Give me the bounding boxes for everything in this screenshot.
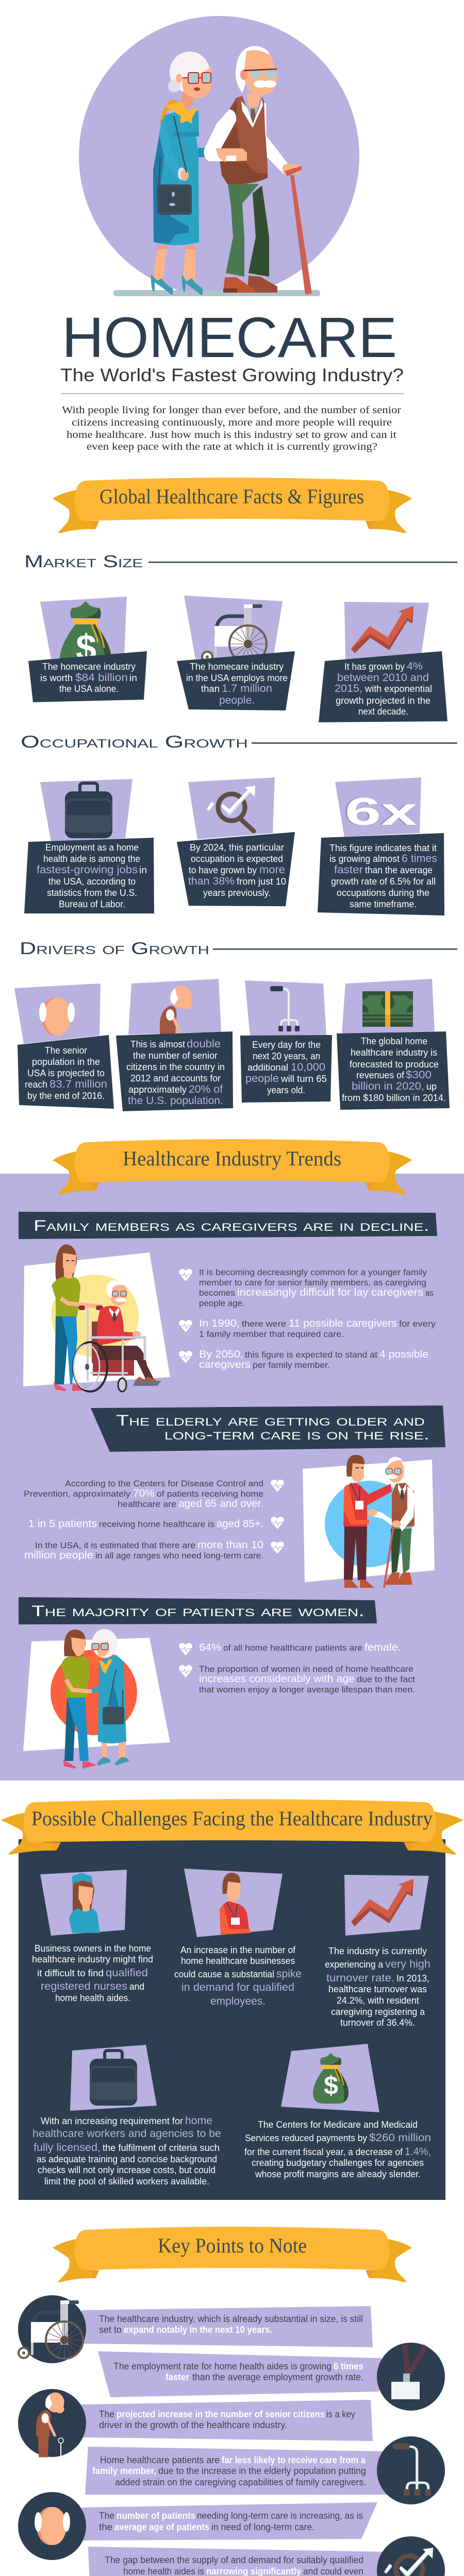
text: very high turnover rate: In 2013, (396, 1973, 429, 1984)
text: spike in demand: employees. (210, 1995, 266, 2007)
icon: heart bullet (179, 1665, 192, 1677)
text: 10,000 people: 10,000 (291, 1061, 325, 1073)
text: lifespan: The proportion of women in need of home healthcare (199, 1664, 413, 1674)
text: $260 million: 1.4%, (405, 2146, 431, 2158)
text: 6 times faster: same timeframe. (350, 899, 417, 909)
text: more than 38%: By 2024, this particular (190, 842, 284, 853)
text: 6 times faster: This figure indicates that it (329, 843, 437, 853)
header: family members (19, 1212, 437, 1239)
panel: market size card 3 (319, 602, 448, 722)
text: very high turnover rate: very high (385, 1958, 430, 1970)
text: spike in demand: spike (276, 1968, 302, 1980)
text: more than 10 million (24, 1539, 263, 1561)
text: 70% aged 65 and over (24, 1479, 263, 1510)
text: double / 20%: 20% of (189, 1083, 223, 1095)
header: majority are women (19, 1597, 377, 1624)
intro paragraph: With people living for longer than ever before, and the number of senior (62, 404, 401, 416)
text: 1990 figure: 11 possible caregivers (289, 1318, 397, 1329)
text: The gap between the supply of and demand for suitably qualified (105, 2555, 363, 2565)
panel: healthcare industry trends (0, 1139, 464, 1781)
text: fastest-growing jobs: fastest-growing jobs (37, 864, 138, 876)
text: $84 billion: $84 billion (75, 672, 128, 684)
text: double / 20% (126, 1038, 225, 1107)
text: qualified nurses: and (129, 1981, 144, 1992)
text: Home healthcare patients are (100, 2455, 220, 2465)
header: elderly getting older: long-term care is on the rise. (164, 1426, 429, 1443)
text: 2050 figure: this figure is expected to stand at (245, 1350, 377, 1360)
challenge card: turnover (325, 1875, 430, 2028)
text: is a key (326, 2409, 355, 2419)
key point 3 (18, 2389, 373, 2457)
text: 6 times faster (329, 843, 437, 909)
text: The (99, 2409, 114, 2419)
text: The healthcare industry, which is already substantial in size, is still (99, 2314, 363, 2324)
text: caregiving difficulty: It is becoming decreasingly common for a younger family (199, 1267, 427, 1277)
text: $300 billion: billion in 2020, (352, 1080, 424, 1092)
text: spike in demand: in demand for qualified (181, 1981, 294, 1993)
text: caregiving difficulty (199, 1267, 434, 1308)
text: 70% aged 65 and over: healthcare are (118, 1499, 176, 1509)
text: 4% growth: growth projected in the (336, 696, 430, 706)
text: very high turnover rate: 24.2%, with resident (337, 1995, 419, 2006)
text: very high turnover rate: healthcare turnover was (328, 1984, 427, 1994)
text: 1.7 million people: The homecare industry (190, 662, 284, 672)
text: 6 times (334, 2361, 363, 2371)
icon: 6x: 6x (343, 790, 415, 833)
text: than the average employment growth rate. (192, 2372, 363, 2382)
text: $300 billion: forecasted to produce (350, 1059, 439, 1070)
text: $260 million: Services reduced payments by (245, 2133, 367, 2143)
text: more than 38%: than 38% (188, 875, 235, 887)
text: 1 in 5 patients (28, 1518, 263, 1530)
challenge card: nurses (32, 1870, 153, 2003)
text: more than 38%: to have grown by (189, 865, 257, 875)
panel: drivers card 4 (337, 979, 450, 1110)
icon: heart bullet (179, 1643, 192, 1655)
text: 83.7 million: The senior (45, 1045, 87, 1056)
panel: occupational card 3 (318, 777, 444, 916)
text: double / 20%: the number of senior (133, 1050, 218, 1061)
banner: Global Healthcare Facts & Figures: Global Healthcare Facts & Figures (100, 485, 364, 508)
text: very high turnover rate (325, 1946, 430, 2028)
text: qualified nurses: healthcare industry might find (32, 1954, 153, 1964)
text: caregiving difficulty: becomes (199, 1288, 235, 1298)
header: elderly getting older (91, 1405, 445, 1452)
icon: male carer (220, 1873, 251, 1935)
illustration: carer and elderly man (303, 1455, 435, 1588)
text: 83.7 million: population in the (32, 1057, 100, 1067)
challenge card: payments (244, 2044, 431, 2179)
panel: drivers card 2 (116, 979, 233, 1111)
text: $260 million: whose profit margins are already slender. (255, 2169, 421, 2179)
text: 4% growth: next decade. (358, 706, 408, 717)
text: 70% aged 65 and over: According to the Centers for Disease Control and (65, 1479, 263, 1488)
header: family members: Family members as caregivers are in decline. (34, 1217, 429, 1234)
icon: 6x: 6x (345, 790, 417, 833)
banner: Key Points to Note (53, 2227, 412, 2282)
key point 4 (85, 2436, 445, 2504)
panel: drivers card 1 (14, 984, 114, 1109)
text: spike in demand: An increase in the number of (180, 1945, 296, 1955)
text: $84 billion: in (129, 673, 137, 683)
text: 1990 figure (199, 1318, 436, 1339)
icon: rising arrow (351, 606, 413, 653)
heading: Drivers of Growth: Drivers of Growth (20, 939, 209, 958)
text: 4% growth: with exponential (364, 684, 432, 694)
text: 83.7 million (25, 1045, 107, 1101)
elderly woman (151, 52, 211, 295)
text: 1990 figure: there were (242, 1319, 286, 1329)
text: in need of long-term care. (211, 2522, 314, 2532)
text: double / 20%: the U.S. population. (128, 1095, 223, 1107)
text: fully licensed: home (185, 2115, 212, 2127)
text (99, 2409, 355, 2430)
text: 10,000 people: will turn 65 (280, 1074, 327, 1084)
text: $300 billion (342, 1036, 446, 1103)
text: 6 times faster: is growing almost (329, 854, 400, 864)
icon: head in circle (18, 2492, 86, 2560)
banner: Healthcare Industry Trends: Healthcare Industry Trends (123, 1147, 341, 1170)
text: fastest-growing jobs: Employment as a home (45, 842, 139, 853)
text: more than 38%: more (259, 864, 285, 876)
text: qualified nurses: it difficult to find (37, 1968, 104, 1978)
intro paragraph: citizens increasing continuously, more and more people will require (72, 417, 392, 428)
text: $84 billion: is worth (40, 673, 73, 683)
text: 10,000 people: years old. (267, 1085, 305, 1095)
text: 70% aged 65 and over: aged 65 and over. (178, 1498, 263, 1510)
hero backdrop circle (79, 16, 359, 296)
text: 10,000 people: next 20 years, an (253, 1051, 320, 1061)
text: 4% growth: 4% (407, 660, 423, 672)
banner: Possible Challenges: Possible Challenges Facing the Healthcare Industry (31, 1807, 433, 1830)
text: $260 million: $260 million (369, 2132, 431, 2144)
text: 64% female: female. (364, 1642, 401, 1653)
text: fully licensed: fully licensed, (34, 2142, 101, 2154)
text: fully licensed: healthcare workers and agencies to be (32, 2128, 221, 2140)
text: The (99, 2511, 114, 2521)
text: 6 times faster: growth rate of 6.5% for all (331, 876, 436, 887)
heading: Market Size: Market Size (24, 552, 143, 571)
text: 6 times faster: 6 times (402, 853, 437, 865)
text: 10,000 people: Every day for the (252, 1040, 321, 1050)
text: 1.7 million people: in the USA employs more (186, 673, 288, 683)
text: more than 10 million: million people (24, 1550, 93, 1561)
key point 5 (18, 2492, 377, 2560)
icon: quad cane (270, 986, 300, 1031)
text: 10,000 people (245, 1040, 327, 1095)
text: 1 in 5 patients: 1 in 5 patients (28, 1518, 97, 1530)
text: 64% female: 64% (199, 1642, 221, 1653)
text: 83.7 million: USA is projected to (27, 1068, 105, 1078)
text: qualified nurses (32, 1943, 153, 2003)
text: caregiving difficulty: increasingly difficult for lay caregivers (237, 1287, 423, 1298)
text: 83.7 million: reach (25, 1079, 47, 1090)
text (99, 2314, 363, 2335)
text: 4% growth (335, 660, 432, 717)
text: 2050 figure: 4 possible (379, 1349, 428, 1360)
text: 10,000 people: people (245, 1073, 279, 1084)
banner: Possible Challenges (1, 1799, 463, 1855)
intro paragraph (62, 404, 401, 452)
text: spike in demand (174, 1945, 302, 2007)
text: the (99, 2522, 112, 2532)
text (92, 2455, 366, 2487)
text: more than 38% (188, 842, 286, 898)
heading: Occupational Growth: Occupational Growth (21, 732, 248, 751)
icon: money bag (60, 601, 111, 674)
illustration: two women (23, 1629, 170, 1769)
text: more than 38%: from just 10 (237, 876, 286, 887)
header: majority are women: The majority of patients are women. (31, 1603, 364, 1620)
text: $260 million (244, 2120, 431, 2179)
icon: wheelchair (202, 604, 267, 663)
text: number of patients (117, 2511, 195, 2521)
icon: magnifier with check (207, 786, 255, 831)
banner: Global Healthcare Facts & Figures (53, 478, 412, 533)
text: more than 38%: years previously. (203, 888, 271, 898)
subtitle: The World's Fastest Growing Industry? (60, 365, 404, 385)
text: very high turnover rate: turnover rate. (326, 1972, 394, 1984)
key point 2 (98, 2343, 445, 2411)
icon: heart bullet (271, 1517, 284, 1529)
text: $300 billion: from $180 billion in 2014. (342, 1093, 446, 1103)
text: very high turnover rate: The industry is currently (328, 1946, 427, 1956)
banner: Healthcare Industry Trends (53, 1139, 412, 1195)
text: 2050 figure: per family member. (253, 1360, 330, 1370)
text: 83.7 million: by the end of 2016. (27, 1091, 105, 1101)
text: 70% aged 65 and over: Prevention, approximately (24, 1489, 131, 1499)
text: very high turnover rate: experiencing a (325, 1959, 384, 1970)
text (113, 2361, 363, 2382)
text: 6 times faster: occupations during the (337, 888, 429, 898)
text: projected increase in the number of senior citizens (117, 2409, 325, 2419)
icon: stooped senior (160, 986, 192, 1059)
text: 2050 figure: caregivers (199, 1359, 251, 1370)
text: 1.7 million people (186, 662, 288, 706)
text: qualified nurses: registered nurses (41, 1980, 127, 1992)
text: caregiving difficulty: as (425, 1288, 434, 1298)
text: double / 20%: 2012 and accounts for (130, 1073, 221, 1083)
text: qualified nurses: qualified (106, 1967, 148, 1979)
text: 1.7 million people: 1.7 million (222, 683, 272, 694)
text: fully licensed: limit the pool of skilled workers available. (44, 2176, 209, 2187)
icon: head (39, 997, 75, 1036)
text: faster (165, 2372, 189, 2382)
icon: money bag: $ (76, 628, 96, 669)
text: fully licensed: checks will not only increase costs, but could (38, 2165, 216, 2175)
icon: money bag (313, 2053, 349, 2104)
intro paragraph: home healthcare. Just how much is this industry set to grow and can it (67, 429, 396, 440)
text: $84 billion (40, 662, 137, 694)
icon: 6x (343, 790, 417, 833)
text: 10,000 people: additional (247, 1062, 288, 1073)
bullets: family caregivers (179, 1267, 436, 1370)
text: $260 million: The Centers for Medicare and Medicaid (258, 2120, 418, 2130)
text: 2050 figure (199, 1349, 428, 1370)
text: added strain on the caregiving capabilities of family caregivers. (115, 2477, 366, 2487)
text: more than 10 million: more than 10 (197, 1539, 263, 1551)
icon: heart bullet (271, 1541, 284, 1554)
challenge card: demand spike (174, 1869, 302, 2007)
text: fully licensed (32, 2115, 221, 2187)
text: $84 billion: the USA alone. (59, 684, 119, 694)
hero illustration: elderly couple (79, 16, 359, 296)
text: spike in demand: could cause a substantial (174, 1969, 274, 1979)
icon: nurse (69, 1873, 100, 1933)
text: fully licensed: With an increasing requirement for (41, 2116, 183, 2126)
panel: drivers card 3 (240, 980, 332, 1103)
text: fastest-growing jobs: the USA, according to (48, 876, 136, 887)
icon: wheelchair in circle (18, 2295, 86, 2363)
icon: briefcase (65, 783, 112, 838)
icon: briefcase (90, 2050, 137, 2106)
text: fastest-growing jobs (37, 842, 147, 909)
text: 4% growth: between 2010 and (337, 672, 429, 684)
text: 1 in 5 patients: aged 85+. (217, 1518, 263, 1530)
text: $84 billion: The homecare industry (42, 662, 136, 672)
text: double / 20%: citizens in the country in (126, 1062, 225, 1072)
text: lifespan: increases considerably with age (199, 1673, 355, 1685)
text: 1990 figure: In 1990, (199, 1318, 240, 1329)
title: HOMECARE (62, 306, 397, 369)
text: $300 billion: healthcare industry is (351, 1047, 437, 1058)
icon: rising arrow (351, 1879, 413, 1926)
text: 1990 figure: 1 family member that required care. (199, 1329, 344, 1339)
text: 64% female: of all home healthcare patients are (223, 1643, 362, 1653)
text: double / 20%: This is almost (130, 1039, 185, 1049)
text: $300 billion: up (426, 1081, 437, 1092)
intro paragraph: even keep pace with the rate at which it is currently growing? (87, 441, 377, 452)
text: set to (99, 2325, 122, 2335)
bullets: women patients (179, 1642, 415, 1694)
text: fastest-growing jobs: Bureau of Labor. (59, 899, 125, 909)
icon: heart bullet (271, 1480, 284, 1492)
text: 1.7 million people: people. (219, 694, 255, 706)
header: elderly getting older: The elderly are getting older and (116, 1412, 425, 1429)
panel: market size card 1 (28, 597, 147, 702)
icon: heart bullet (179, 1351, 192, 1363)
text: average age of patients (114, 2522, 209, 2532)
text: 1.7 million people: than (201, 684, 220, 694)
text: 6 times faster: than the average (365, 865, 433, 875)
text (105, 2555, 363, 2576)
text: fully licensed: as adequate training and concise background (37, 2154, 217, 2164)
text: fastest-growing jobs: statistics from the U.S. (47, 888, 137, 898)
text: double / 20%: approximately (128, 1084, 187, 1095)
text: more than 10 million: in all age ranges who need long-term care. (95, 1551, 263, 1561)
bullets: long-term care (24, 1479, 284, 1561)
panel: challenges (1, 1799, 463, 2200)
text: 4% growth: 2015, (335, 683, 362, 694)
text: $300 billion: The global home (361, 1036, 427, 1046)
text: lifespan: due to the fact (357, 1674, 415, 1684)
text: caregiving difficulty: people age. (199, 1298, 245, 1308)
text: fastest-growing jobs: health aide is among the (43, 854, 140, 864)
text: 70% aged 65 and over: 70% (133, 1488, 155, 1499)
icon: heart bullet (179, 1269, 192, 1281)
icon: money bag: $ (324, 2071, 338, 2100)
text (99, 2511, 363, 2532)
challenge card: licensing (32, 2045, 221, 2187)
icon: cane in circle (377, 2436, 445, 2504)
text: 6 times faster: faster (334, 864, 363, 876)
elderly man with cane (204, 46, 312, 295)
text: expand notably in the next 10 years. (124, 2325, 272, 2335)
panel: occupational card 2 (177, 777, 295, 906)
text: caregiving difficulty: member to care for senior family members, as caregiving (199, 1278, 426, 1287)
text: 83.7 million: 83.7 million (49, 1078, 107, 1090)
text: very high turnover rate: caregiving registering a (331, 2007, 425, 2017)
text: far less likely to receive care from a (222, 2455, 366, 2465)
icon: stooped senior in circle (18, 2389, 86, 2457)
icon: magnifier in circle (377, 2536, 445, 2576)
icon: heart bullet (179, 1320, 192, 1332)
text: 1990 figure: for every (399, 1319, 436, 1329)
text: 1 in 5 patients: receiving home healthcare is (99, 1519, 214, 1529)
panel: market size card 2 (177, 596, 295, 710)
panel: occupational card 1 (24, 779, 154, 913)
text: double / 20%: double (187, 1038, 221, 1050)
text: family member, (92, 2466, 156, 2476)
text: 2050 figure: By 2050, (199, 1349, 243, 1360)
text: spike in demand: home healthcare businesses (181, 1956, 295, 1966)
text: The employment rate for home health aides is growing (113, 2361, 332, 2371)
text: lifespan (199, 1664, 415, 1694)
text: qualified nurses: Business owners in the home (35, 1943, 151, 1954)
banner: Key Points to Note: Key Points to Note (158, 2234, 307, 2257)
text: due to the increase in the elderly population putting (158, 2466, 366, 2476)
text: 70% aged 65 and over: of patients receiving home (157, 1489, 263, 1499)
text: very high turnover rate: turnover of 36.4%. (340, 2018, 415, 2028)
text: 4% growth: It has grown by (344, 662, 405, 672)
text: lifespan: that women enjoy a longer average lifespan than men. (199, 1685, 415, 1694)
text: $300 billion: revenues of (356, 1070, 405, 1080)
icon: ID badge in circle (377, 2343, 445, 2411)
text: 64% female (199, 1642, 401, 1653)
key point 6 (88, 2536, 445, 2576)
text: driver in the growth of the healthcare industry. (99, 2420, 287, 2430)
text: fastest-growing jobs: in (139, 865, 147, 875)
text: needing long-term care is increasing, as is (197, 2511, 363, 2521)
text: more than 10 million: In the USA, it is estimated that there are (35, 1540, 195, 1550)
illustration: caregiver pushing wheelchair (23, 1244, 170, 1392)
text: fully licensed: the fulfilment of criteria such (103, 2143, 220, 2153)
floor bar (113, 290, 320, 296)
text: $260 million: for the current fiscal year, a decrease of (244, 2147, 403, 2157)
key point 1 (18, 2295, 373, 2363)
text: $260 million: creating budgetary challenges for agencies (252, 2158, 424, 2168)
text: $300 billion: $300 (406, 1069, 432, 1081)
icon: stack of cash (362, 991, 413, 1027)
text: qualified nurses: home health aides. (55, 1993, 130, 2003)
text: more than 38%: occupation is expected (191, 854, 283, 864)
